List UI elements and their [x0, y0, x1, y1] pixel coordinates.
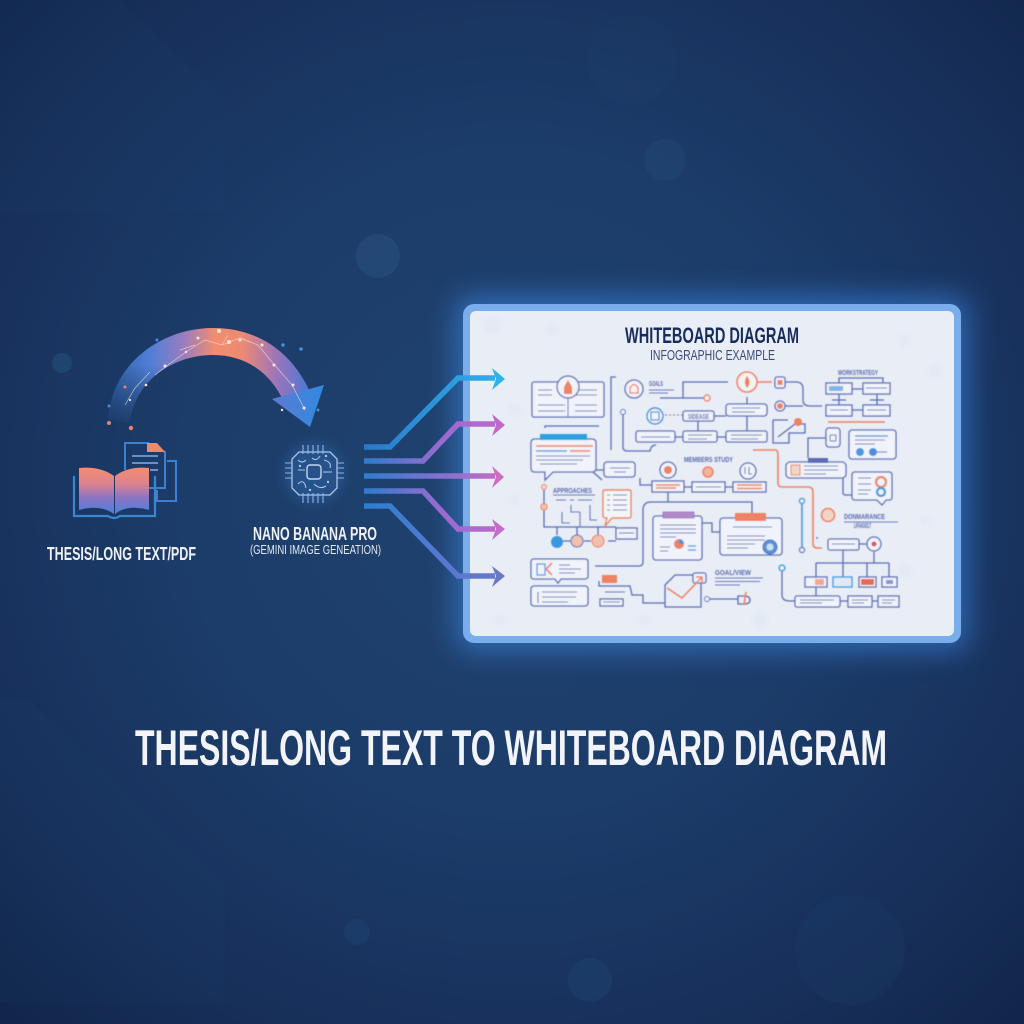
section: goals [620, 372, 805, 443]
arrow: output 5 [364, 506, 505, 587]
icon: book and documents [74, 443, 176, 518]
arrow: output 1 [364, 368, 505, 447]
section: goals: GOALS [649, 381, 663, 388]
speech card [531, 434, 635, 480]
label: model name: NANO BANANA PRO [253, 524, 377, 544]
arrow: output 2 [364, 414, 505, 461]
whiteboard title: WHITEBOARD DIAGRAM [625, 323, 799, 348]
section: workflow grid: WORKSTRATEGY [838, 370, 878, 377]
label: thesis source: THESIS/LONG TEXT/PDF [47, 544, 196, 564]
card: top left with icon [532, 376, 604, 417]
icon: curved transformation arrow [107, 328, 324, 430]
section: governance: DONMARANCE [844, 514, 885, 521]
section: governance: LIFANGIOLT [854, 523, 871, 530]
cards: bottom left [531, 559, 625, 606]
label: model name: (GEMINI IMAGE GENEATION) [250, 542, 381, 557]
panel: whiteboard [455, 296, 969, 651]
icon: trend chart: GOAL/VIEW [715, 570, 751, 577]
card: certificate with seal [720, 513, 782, 555]
card: document with pie [653, 512, 702, 560]
connectors [544, 377, 889, 603]
arrow: output 3 [364, 466, 504, 488]
section: workflow grid [826, 370, 890, 416]
icon: AI chip [284, 443, 344, 503]
section: approaches: APPROACHES [553, 488, 592, 495]
arrow: output 4 [364, 491, 505, 540]
section: members study: MEMBERS STUDY [684, 457, 733, 464]
diagram [531, 370, 899, 607]
section: goals: SIDEAGE [688, 414, 709, 421]
board frame and glow [455, 296, 969, 651]
section: resources [786, 428, 896, 505]
section: members study [652, 457, 766, 492]
icon: trend chart [665, 570, 763, 607]
label: model name [250, 524, 381, 557]
section: governance [779, 498, 899, 607]
section: approaches [541, 484, 637, 548]
whiteboard subtitle: INFOGRAPHIC EXAMPLE [650, 347, 775, 364]
